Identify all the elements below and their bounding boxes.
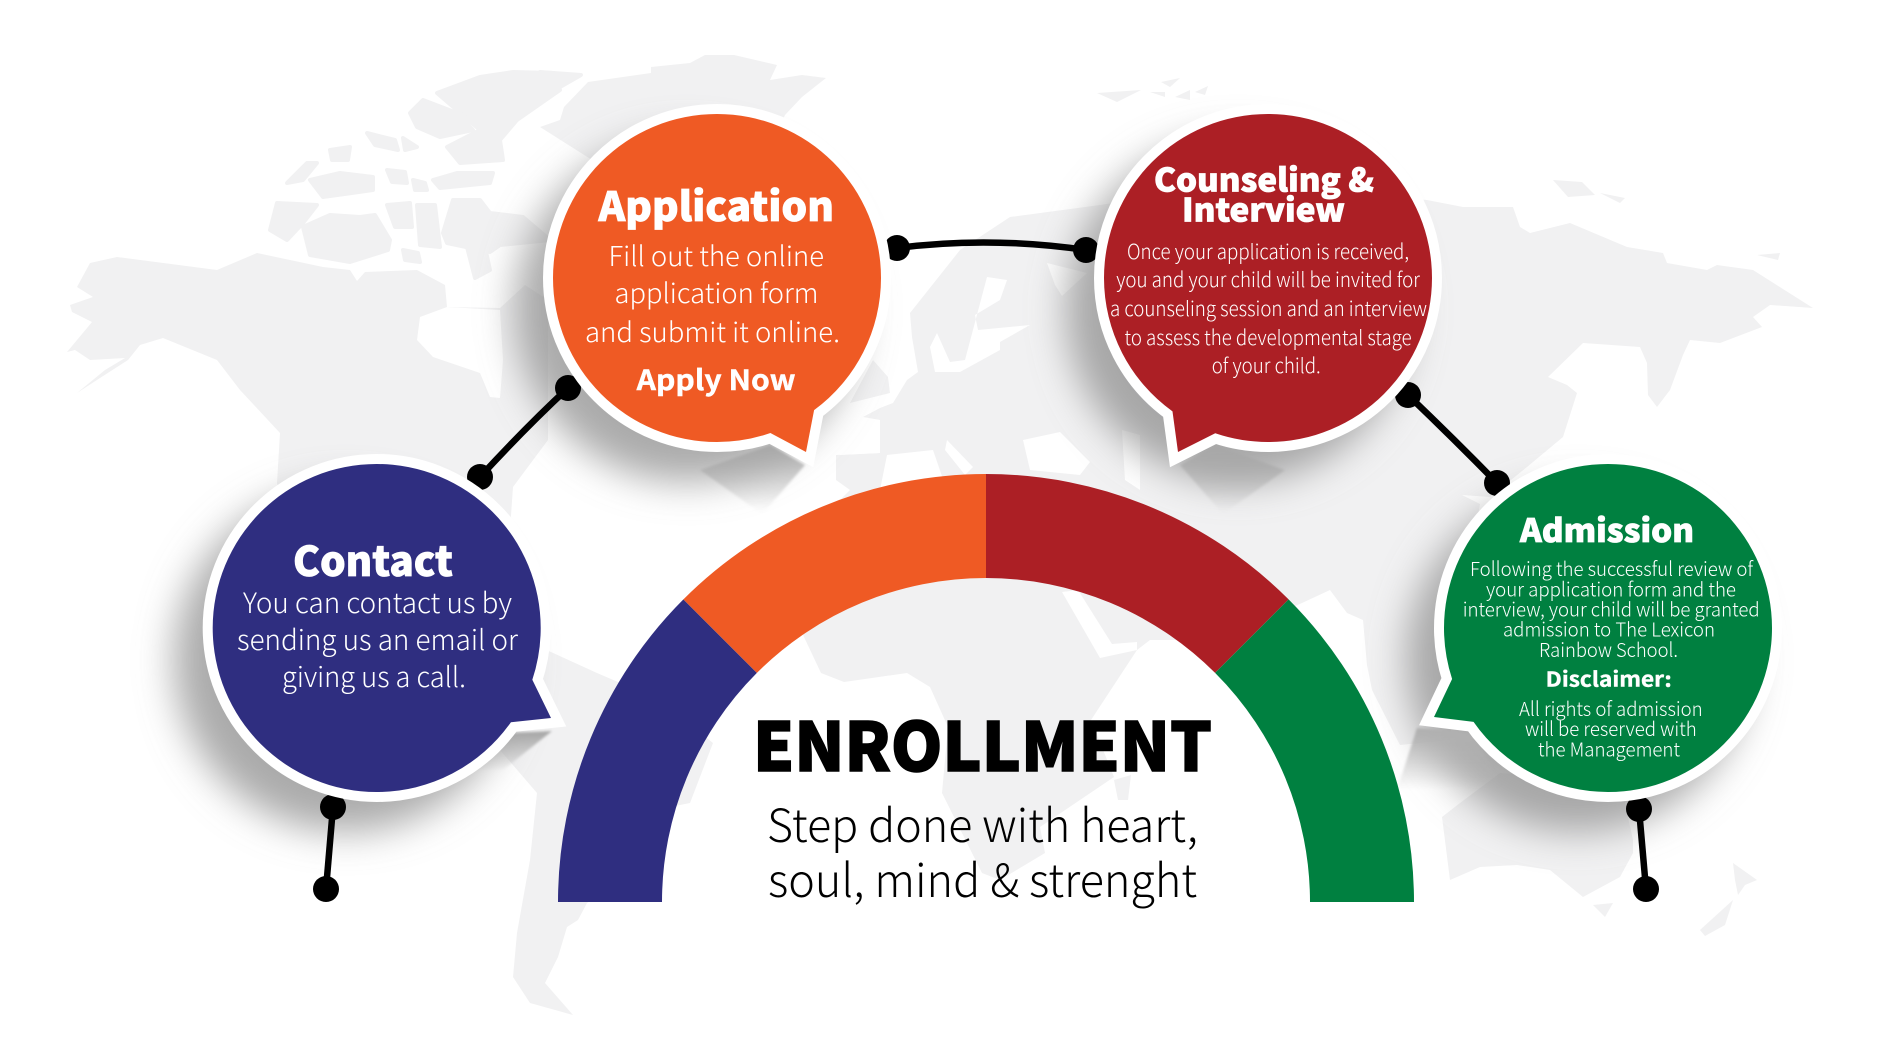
text: application description: and submit it online.	[585, 310, 840, 350]
text: counseling description: of your child.	[1212, 349, 1321, 379]
bubble shadows	[174, 138, 1750, 832]
text: contact description	[237, 582, 519, 696]
text: counseling description	[1110, 235, 1427, 379]
text: contact description: giving us a call.	[282, 656, 466, 696]
title: enrollment: ENROLLMENT	[753, 694, 1212, 791]
heading: contact: Contact	[293, 528, 453, 588]
text: admission description	[1463, 553, 1760, 663]
subtitle	[767, 790, 1198, 911]
connector: application to counseling	[884, 235, 1099, 263]
text: counseling description: you and your child will be invited for	[1116, 263, 1421, 293]
text: contact description: sending us an email or	[237, 619, 519, 659]
connector: contact lower stem	[313, 794, 346, 902]
subheading: disclaimer: Disclaimer:	[1546, 663, 1672, 693]
link: apply now: Apply Now	[636, 359, 796, 399]
heading: application: Application	[597, 175, 834, 233]
text: application description: Fill out the online	[608, 234, 824, 274]
heading: counseling and interview	[1154, 156, 1374, 232]
text: counseling description: Once your application is received,	[1127, 235, 1409, 265]
connector: admission lower stem	[1626, 796, 1659, 902]
heading: admission: Admission	[1519, 506, 1694, 552]
text: disclaimer description: will be reserved with	[1525, 713, 1697, 742]
heading: counseling and interview: Counseling &	[1154, 156, 1374, 202]
panel: counseling and interview	[1104, 114, 1432, 452]
text: admission description: your application form and the	[1486, 574, 1736, 603]
text: counseling description: a counseling session and an interview	[1110, 292, 1427, 322]
text: counseling description: to assess the developmental stage	[1124, 321, 1412, 351]
heading: counseling and interview: Interview	[1182, 186, 1345, 232]
text: admission description: Rainbow School.	[1539, 634, 1678, 663]
connector: counseling to admission	[1395, 382, 1510, 496]
subtitle: Step done with heart,	[767, 790, 1198, 856]
text: contact description: You can contact us by	[243, 582, 512, 622]
text: disclaimer description: All rights of admission	[1519, 693, 1703, 722]
text: application description: application form	[614, 271, 818, 311]
central arch: four-colour semicircle	[558, 474, 1414, 902]
text: disclaimer description: the Management	[1538, 734, 1680, 763]
panel: admission	[1434, 464, 1772, 792]
subtitle: soul, mind & strenght	[768, 845, 1197, 911]
text: admission description: interview, your child will be granted	[1463, 594, 1760, 623]
text: disclaimer description	[1519, 693, 1703, 763]
text: application description	[585, 234, 840, 350]
text: admission description: Following the successful review of	[1470, 553, 1754, 582]
panel: contact	[213, 464, 551, 792]
text: admission description: admission to The Lexicon	[1503, 614, 1715, 643]
connector: contact to application	[467, 375, 581, 490]
panel: application	[553, 114, 881, 452]
